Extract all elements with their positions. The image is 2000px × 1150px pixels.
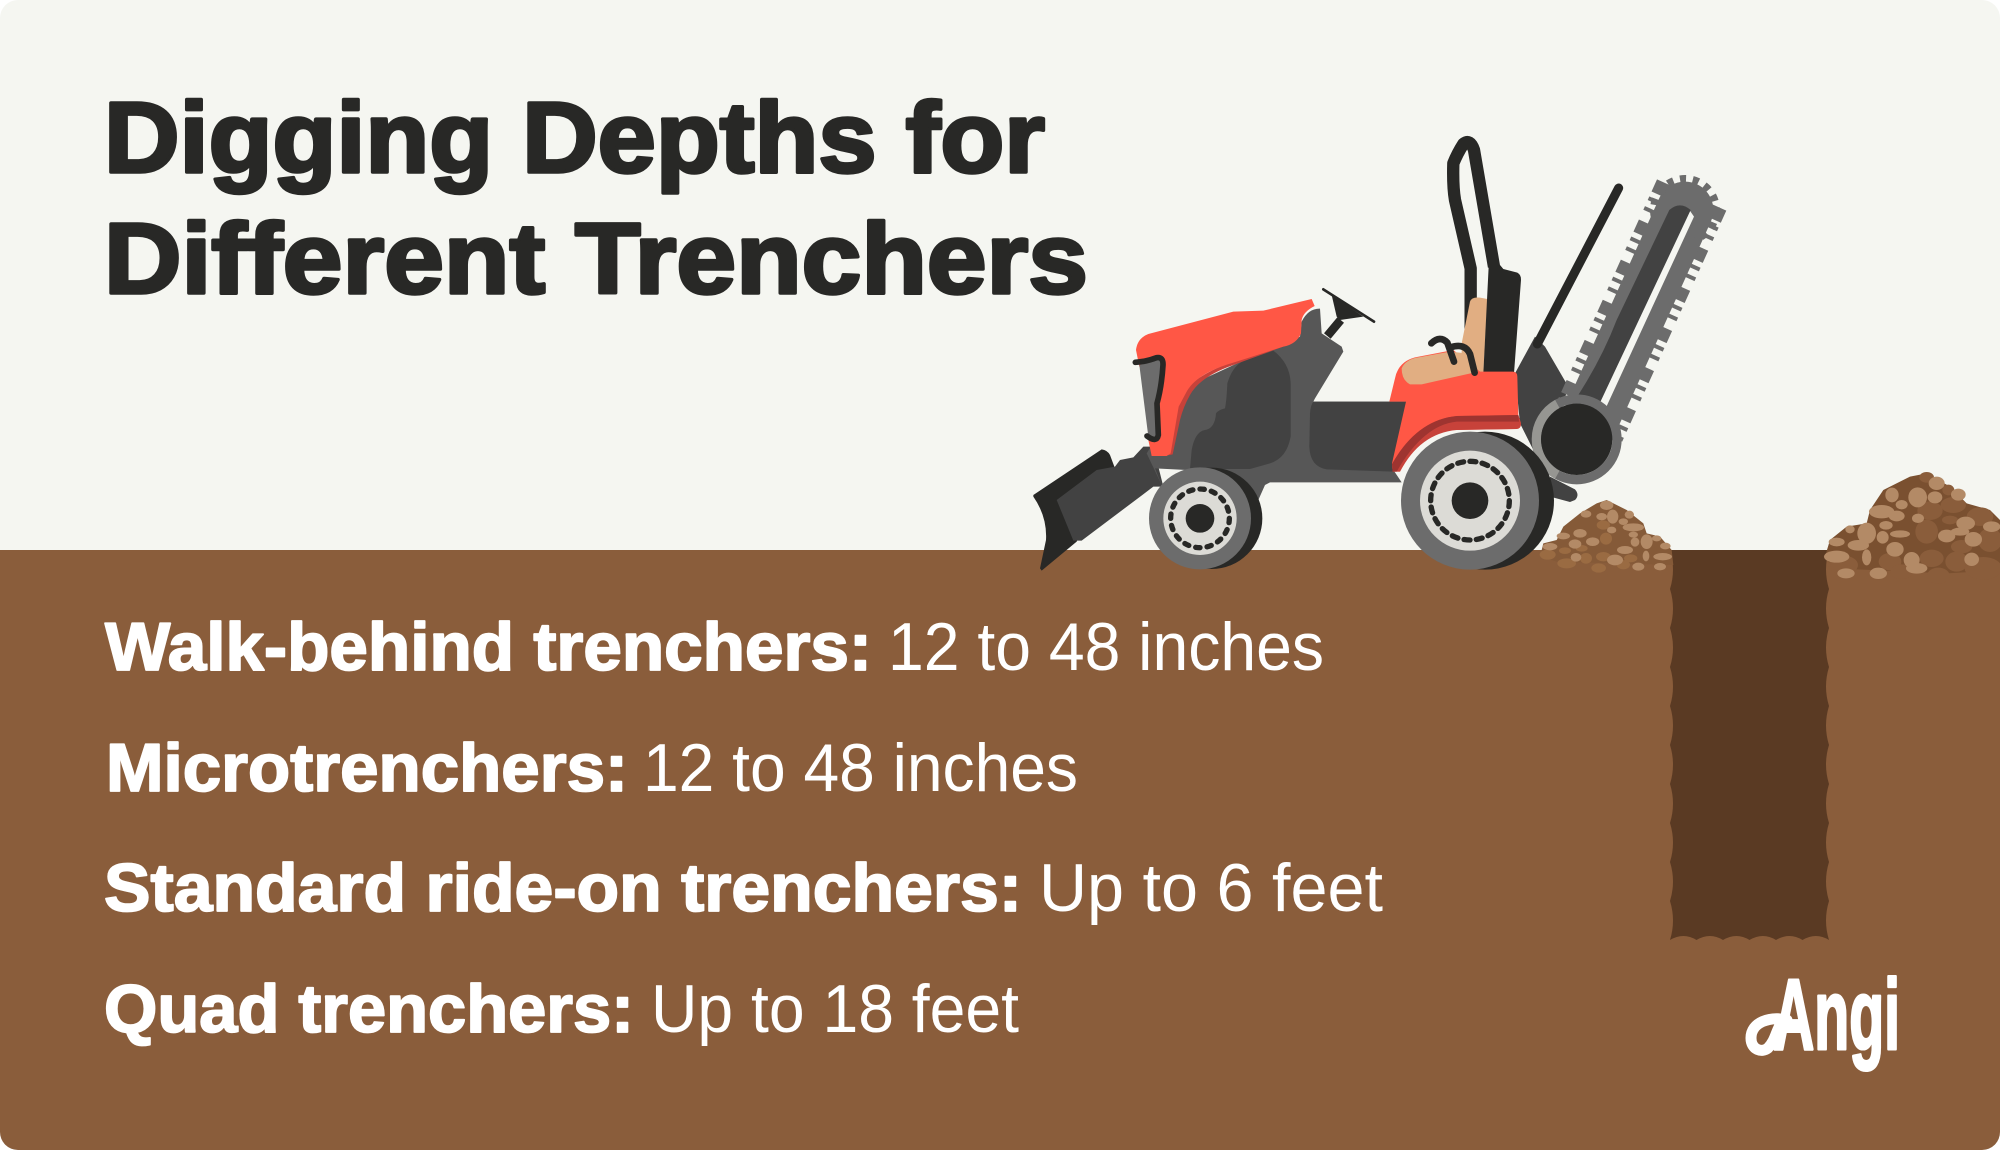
quad row <box>106 982 1019 1046</box>
chain slot <box>1596 208 1694 413</box>
microtrenchers row: Microtrenchers: <box>106 730 628 806</box>
logo: Angi: Angi <box>1773 959 1900 1071</box>
standard ride-on row <box>105 861 1382 925</box>
fender trim shadow <box>1392 415 1519 472</box>
list of digging depths <box>104 609 1383 1047</box>
seat tan back <box>1462 297 1487 375</box>
dirt pile: left <box>1540 500 1673 573</box>
dirt pile: right <box>1824 472 2000 584</box>
drive wheel <box>1536 399 1617 480</box>
icon: tractor body <box>1033 142 1554 571</box>
grill <box>1139 360 1160 440</box>
standard ride-on row: Up to 6 feet <box>1039 850 1383 926</box>
walk-behind row <box>104 620 1322 672</box>
blade arm <box>1057 447 1163 541</box>
title: Digging Depths for <box>104 82 1045 194</box>
standard ride-on row: Standard ride-on trenchers: <box>104 850 1022 926</box>
chain bar <box>1572 205 1691 408</box>
blade <box>1033 449 1114 571</box>
steering wheel <box>1323 289 1374 336</box>
trench <box>1670 550 1829 940</box>
rear wheel <box>1401 432 1554 570</box>
microtrenchers row <box>110 741 1076 792</box>
red hood shadow <box>1168 346 1284 456</box>
microtrenchers row: 12 to 48 inches <box>643 730 1078 806</box>
pole <box>1537 188 1619 344</box>
red hood <box>1136 299 1315 456</box>
seat frame <box>1453 142 1494 333</box>
backrest <box>1483 265 1521 373</box>
quad row: Quad trenchers: <box>104 971 634 1047</box>
icon: digging chain assembly <box>1515 179 1716 502</box>
engine panel <box>1190 351 1291 469</box>
ground <box>0 550 2000 1150</box>
body frame <box>1147 309 1407 500</box>
chain teeth <box>1585 179 1716 432</box>
seat cushion <box>1402 352 1478 384</box>
title: Different Trenchers <box>104 203 1088 315</box>
walk-behind row: Walk-behind trenchers: <box>105 609 872 685</box>
quad row: Up to 18 feet <box>651 971 1019 1047</box>
rear red fender <box>1389 350 1521 472</box>
title <box>109 98 1086 296</box>
mount <box>1515 337 1577 502</box>
front wheel <box>1149 467 1262 569</box>
armrest <box>1431 339 1475 373</box>
rear frame panel <box>1309 402 1407 472</box>
grill handle <box>1135 358 1163 439</box>
fender trim <box>1392 415 1521 472</box>
walk-behind row: 12 to 48 inches <box>888 609 1324 685</box>
logo: Angi <box>1746 975 1897 1072</box>
